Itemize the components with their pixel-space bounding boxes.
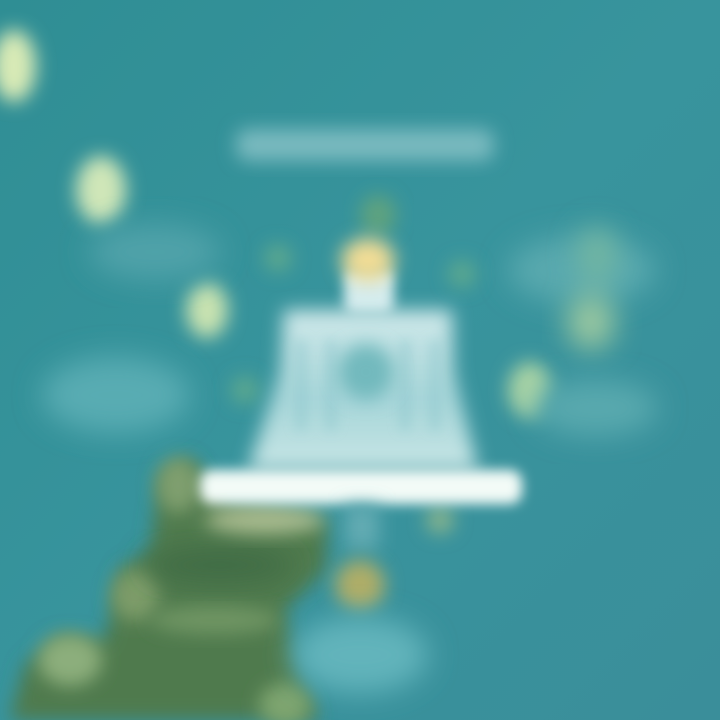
bell clapper stem [345, 505, 379, 549]
bell neck [344, 268, 394, 314]
illustration: green stepped tower [10, 457, 328, 720]
icon: gold coin [335, 560, 385, 610]
bell tip [360, 195, 396, 235]
icon: bell [200, 195, 522, 549]
title [236, 129, 494, 161]
text block: upper-left label [89, 224, 221, 280]
text block: lower-left label [42, 357, 190, 433]
text block: lower-right label [534, 380, 658, 436]
bell knob [341, 238, 395, 282]
icon: lower-right green blob [508, 362, 552, 418]
icon: upper-left green blob [76, 156, 126, 224]
icon: upper-right green marker [567, 227, 617, 350]
bell stripes [296, 340, 440, 430]
text block: bottom label [292, 617, 428, 693]
small green accents around the bell [231, 244, 476, 534]
icon: middle-left green blob [186, 282, 228, 338]
bell body [248, 310, 478, 470]
text block: upper-right label [508, 236, 656, 304]
icon: top-left light green blob [0, 30, 36, 102]
bell emblem [338, 344, 394, 400]
bell base [200, 470, 522, 504]
